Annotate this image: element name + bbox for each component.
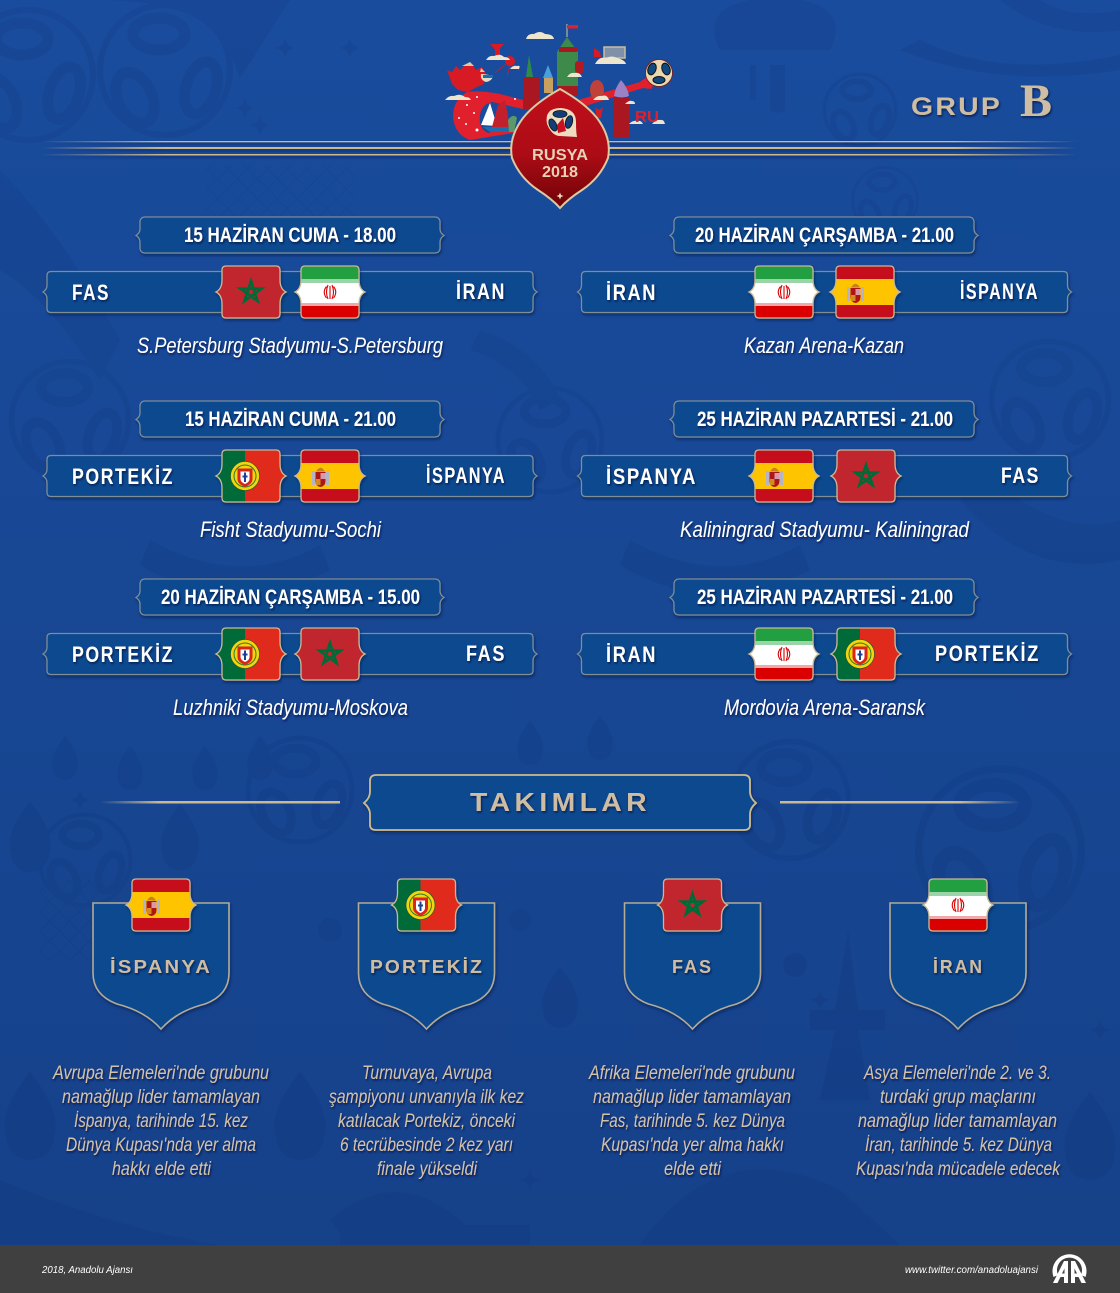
header illustration: Russia 2018 city skyline: RU bbox=[635, 109, 659, 126]
team bar bbox=[578, 634, 1072, 674]
flag: Morocco bbox=[831, 450, 901, 502]
description: Asya Elemeleri'nde 2. ve 3. bbox=[863, 1063, 1051, 1084]
description: hakkı elde etti bbox=[112, 1159, 212, 1180]
date text: 20 HAZİRAN ÇARŞAMBA - 21.00 bbox=[695, 224, 954, 247]
team bar bbox=[43, 634, 537, 674]
towers bbox=[526, 55, 533, 77]
satellite bbox=[490, 44, 504, 55]
team name: İSPANYA bbox=[110, 957, 212, 977]
date banner bbox=[670, 401, 978, 437]
heading: Grup B: B bbox=[1020, 75, 1052, 127]
description: İran, tarihinde 5. kez Dünya bbox=[865, 1135, 1052, 1156]
venue: Luzhniki Stadyumu-Moskova bbox=[173, 695, 408, 720]
twitter url: www.twitter.com/anadoluajansi bbox=[905, 1265, 1039, 1276]
flag: Spain bbox=[124, 879, 198, 931]
description bbox=[52, 1063, 269, 1180]
team card: İspanya bbox=[52, 879, 269, 1180]
flag: Morocco bbox=[658, 879, 728, 931]
date banner bbox=[670, 217, 978, 253]
triple header rule bbox=[40, 141, 1078, 156]
match: FAS - İRAN bbox=[43, 217, 537, 358]
date banner bbox=[136, 401, 444, 437]
team card: Portekiz bbox=[329, 879, 524, 1180]
shield bbox=[624, 903, 760, 1029]
description: İspanya, tarihinde 15. kez bbox=[74, 1111, 248, 1132]
date text: 25 HAZİRAN PAZARTESİ - 21.00 bbox=[697, 586, 953, 609]
description: finale yükseldi bbox=[377, 1159, 478, 1180]
team names: İSPANYA bbox=[606, 464, 697, 489]
flag: Morocco bbox=[295, 628, 365, 680]
team names: İRAN bbox=[606, 642, 657, 667]
description: Kupası'nda yer alma hakkı bbox=[601, 1135, 784, 1156]
description: Fas, tarihinde 5. kez Dünya bbox=[600, 1111, 785, 1132]
goal bbox=[604, 47, 625, 58]
flag: Portugal bbox=[829, 628, 903, 680]
team bar bbox=[578, 272, 1072, 312]
team bar bbox=[43, 456, 537, 496]
footer bar bbox=[0, 1245, 1120, 1293]
match: İSPANYA - FAS bbox=[578, 401, 1072, 542]
emblem: tournament ball bbox=[547, 108, 577, 137]
description: turdaki grup maçlarını bbox=[880, 1087, 1036, 1108]
team names: PORTEKİZ bbox=[72, 642, 174, 667]
team names: FAS bbox=[466, 641, 506, 666]
team bar bbox=[578, 456, 1072, 496]
sails and water bbox=[481, 103, 497, 126]
venue: Kaliningrad Stadyumu- Kaliningrad bbox=[680, 517, 970, 542]
team names: İRAN bbox=[456, 279, 506, 304]
date text: 15 HAZİRAN CUMA - 21.00 bbox=[185, 408, 396, 431]
shield bbox=[358, 903, 494, 1029]
description: namağlup lider tamamlayan bbox=[858, 1111, 1057, 1132]
description bbox=[588, 1063, 795, 1180]
flag: Portugal bbox=[214, 450, 288, 502]
team card: Fas bbox=[588, 879, 795, 1180]
description: namağlup lider tamamlayan bbox=[593, 1087, 791, 1108]
description: Dünya Kupası'nda yer alma bbox=[66, 1135, 256, 1156]
medallion: Rusya 2018: RUSYA bbox=[532, 147, 588, 164]
right ribbon egg and figures bbox=[590, 80, 604, 100]
medallion: Rusya 2018: 2018 bbox=[542, 164, 578, 181]
flag: Iran bbox=[747, 628, 821, 680]
flag: Iran bbox=[293, 266, 367, 318]
team name: FAS bbox=[672, 957, 713, 977]
medallion: Rusya 2018 bbox=[511, 89, 609, 208]
heading banner: Takımlar bbox=[100, 775, 1020, 830]
heading: Grup B: GRUP bbox=[911, 93, 1002, 121]
flag: Spain bbox=[828, 266, 902, 318]
description: Afrika Elemeleri'nde grubunu bbox=[588, 1063, 795, 1084]
team names: PORTEKİZ bbox=[935, 641, 1040, 666]
team bar bbox=[43, 272, 537, 312]
match: PORTEKİZ - FAS bbox=[43, 579, 537, 720]
horses bbox=[447, 64, 486, 92]
date banner bbox=[136, 217, 444, 253]
venue: Mordovia Arena-Saransk bbox=[724, 695, 926, 720]
venue: S.Petersburg Stadyumu-S.Petersburg bbox=[137, 333, 444, 358]
match: İRAN - İSPANYA bbox=[578, 217, 1072, 358]
team names bbox=[606, 463, 1040, 489]
description bbox=[856, 1063, 1061, 1180]
team names bbox=[72, 641, 506, 667]
description bbox=[329, 1063, 524, 1180]
venue: Fisht Stadyumu-Sochi bbox=[200, 517, 382, 542]
team names: FAS bbox=[1001, 463, 1040, 488]
heading banner: Takımlar: TAKIMLAR bbox=[470, 787, 651, 817]
description: Turnuvaya, Avrupa bbox=[362, 1063, 492, 1084]
ribbon loop bbox=[453, 91, 523, 140]
team names bbox=[72, 463, 506, 489]
team names bbox=[606, 279, 1039, 305]
date text: 15 HAZİRAN CUMA - 18.00 bbox=[184, 224, 396, 247]
team name: PORTEKİZ bbox=[370, 957, 484, 977]
icon: AA logo bbox=[1052, 1254, 1087, 1283]
shield bbox=[93, 903, 229, 1029]
team names: FAS bbox=[72, 280, 110, 305]
team names: İSPANYA bbox=[426, 463, 506, 488]
date banner bbox=[670, 579, 978, 615]
flag: Morocco bbox=[216, 266, 286, 318]
flag: Spain bbox=[293, 450, 367, 502]
heading: Grup B bbox=[911, 75, 1052, 127]
description: 6 tecrübesinde 2 kez yarı bbox=[340, 1135, 513, 1156]
date text: 25 HAZİRAN PAZARTESİ - 21.00 bbox=[697, 408, 953, 431]
flag: Spain bbox=[747, 450, 821, 502]
description: Kupası'nda mücadele edecek bbox=[856, 1159, 1061, 1180]
description: Avrupa Elemeleri'nde grubunu bbox=[52, 1063, 269, 1084]
flag: Portugal bbox=[390, 879, 464, 931]
team names bbox=[606, 641, 1040, 667]
team names: PORTEKİZ bbox=[72, 464, 174, 489]
date banner bbox=[136, 579, 444, 615]
match: İRAN - PORTEKİZ bbox=[578, 579, 1072, 720]
team names bbox=[72, 279, 506, 305]
description: şampiyonu unvanıyla ilk kez bbox=[329, 1087, 524, 1108]
description: elde etti bbox=[664, 1159, 722, 1180]
team card: İran bbox=[856, 879, 1061, 1180]
venue: Kazan Arena-Kazan bbox=[744, 333, 904, 358]
date text: 20 HAZİRAN ÇARŞAMBA - 15.00 bbox=[161, 586, 420, 609]
flag: Portugal bbox=[214, 628, 288, 680]
shield bbox=[890, 903, 1026, 1029]
team name: İRAN bbox=[933, 957, 984, 977]
flag: Iran bbox=[921, 879, 995, 931]
credit: 2018, Anadolu Ajansı bbox=[41, 1265, 133, 1276]
flag: Iran bbox=[747, 266, 821, 318]
match: PORTEKİZ - İSPANYA bbox=[43, 401, 537, 542]
header illustration: Russia 2018 city skyline bbox=[445, 24, 672, 140]
description: namağlup lider tamamlayan bbox=[62, 1087, 260, 1108]
team names: İSPANYA bbox=[960, 279, 1039, 304]
team names: İRAN bbox=[606, 280, 657, 305]
description: katılacak Portekiz, önceki bbox=[338, 1111, 516, 1132]
